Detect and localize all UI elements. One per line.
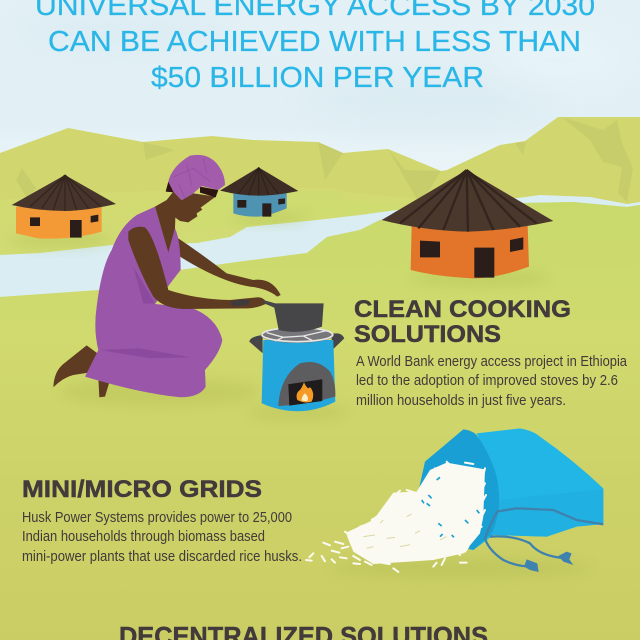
text: mini/micro grids description: Husk Power Systems provides power to 25,000: [22, 510, 292, 526]
title: CAN BE ACHIEVED WITH LESS THAN: [48, 26, 581, 58]
heading: clean cooking solutions: [354, 296, 571, 348]
head wrap: [168, 155, 225, 200]
hem and drawstring: [485, 508, 603, 567]
near arm: [128, 227, 267, 309]
back foot: [53, 345, 97, 387]
text: clean cooking description: led to the adoption of improved stoves by 2.6: [356, 373, 618, 389]
stove handles: [249, 333, 344, 353]
rice pile: [346, 463, 485, 564]
cookstove: [249, 300, 344, 411]
far arm: [173, 235, 281, 297]
hut: small orange left: [12, 175, 116, 239]
loose rice grains: [306, 462, 486, 572]
heading: clean cooking solutions: SOLUTIONS: [354, 321, 501, 348]
dress folds: [100, 267, 190, 358]
mid hills: [0, 188, 640, 300]
title: $50 BILLION PER YEAR: [151, 62, 484, 94]
hair: [166, 182, 218, 197]
hut: large orange foreground: [382, 170, 553, 278]
sack inner fold: [418, 429, 499, 550]
head and neck: [155, 155, 225, 252]
bracelet: [231, 300, 250, 306]
river: [0, 195, 640, 297]
distant mountains: [0, 117, 640, 260]
text: clean cooking description: million households in just five years.: [356, 393, 566, 409]
dress: [85, 207, 222, 397]
heading: clean cooking solutions: CLEAN COOKING: [354, 296, 571, 323]
flame: [297, 382, 313, 403]
text: mini/micro grids description: [22, 510, 302, 565]
grate: [261, 327, 334, 343]
stove body: [262, 340, 335, 411]
foreground ground: [0, 202, 640, 640]
text: mini/micro grids description: mini-power plants that use discarded rice husks.: [22, 549, 302, 565]
title: [35, 0, 595, 94]
sky background: [0, 0, 640, 210]
front toes: [98, 377, 110, 397]
pot: [263, 300, 324, 332]
rice speckle: [363, 514, 447, 548]
hut: small blue back: [220, 167, 298, 217]
sack body: [473, 428, 603, 550]
text: mini/micro grids description: Indian households through biomass based: [22, 529, 265, 545]
heading: mini/micro grids: MINI/MICRO GRIDS: [22, 476, 262, 503]
rice sack: [306, 428, 603, 572]
oven door: [278, 362, 335, 406]
woman cooking: [53, 207, 281, 397]
sack lower band: [473, 489, 603, 550]
soft shadows: [10, 212, 590, 578]
neck and face: [155, 192, 216, 252]
text: clean cooking description: [356, 354, 628, 409]
